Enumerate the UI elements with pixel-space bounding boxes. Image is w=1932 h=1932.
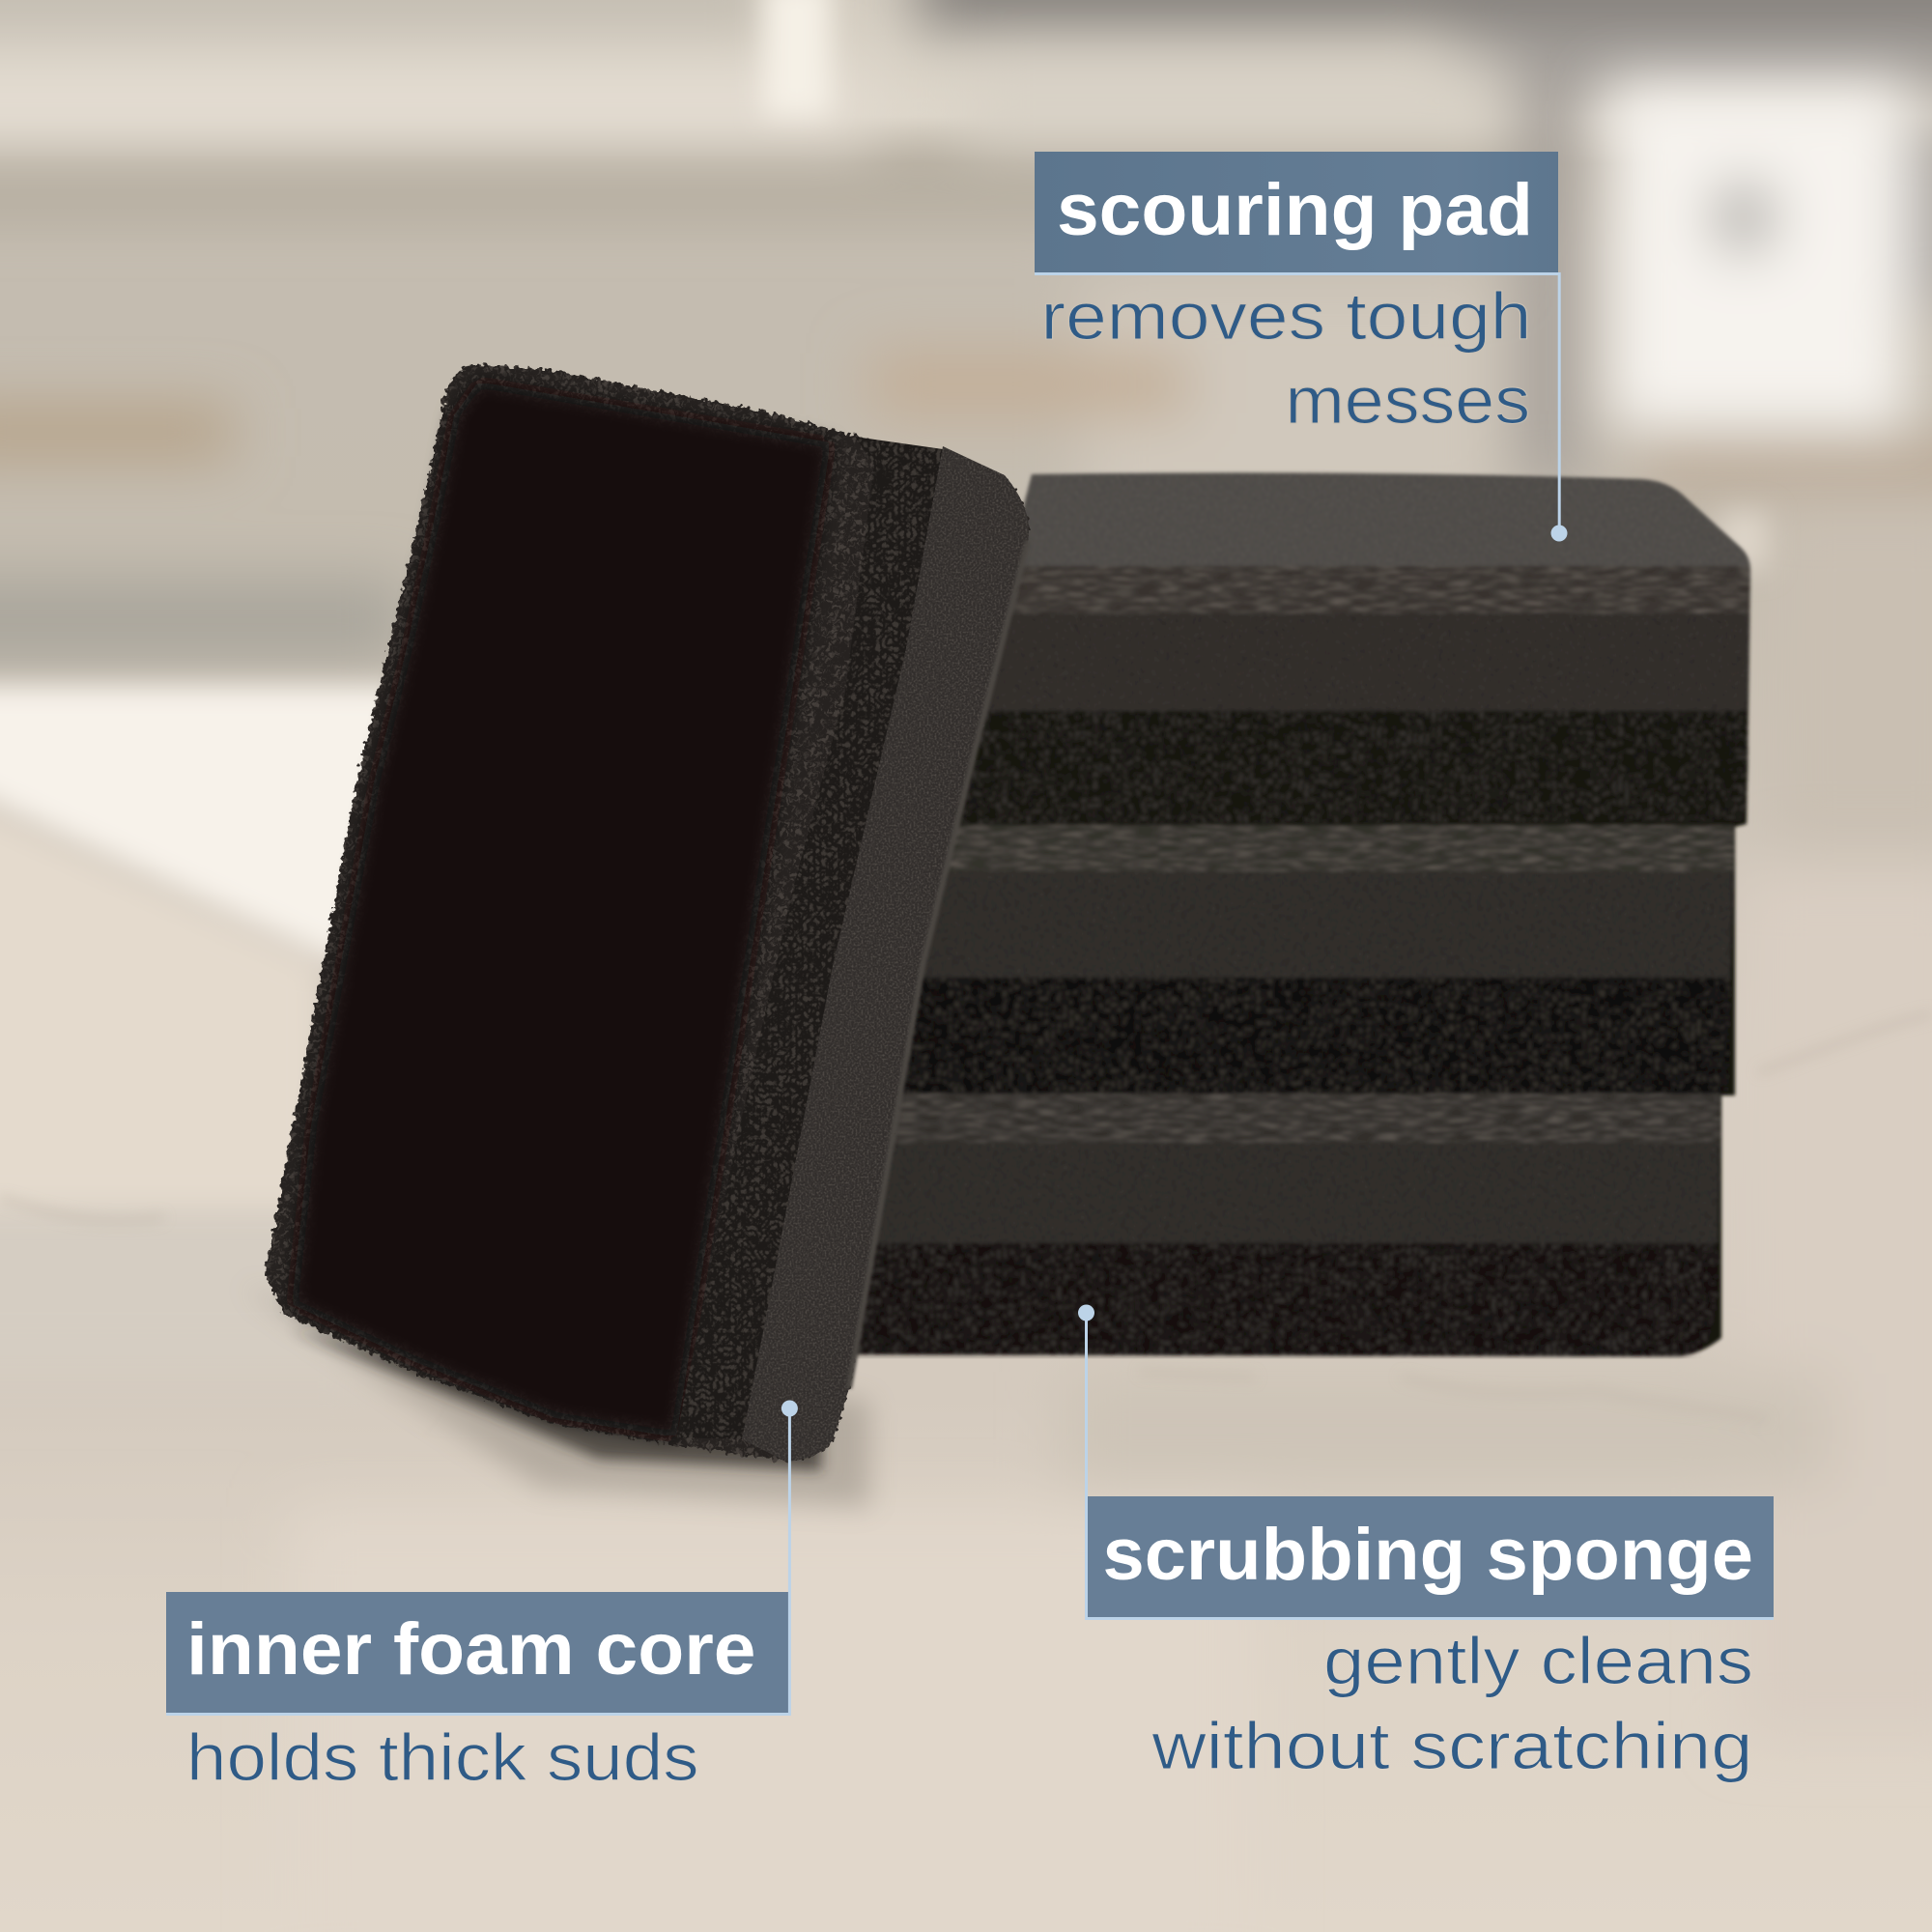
label: inner foam core: inner foam core <box>186 1608 755 1690</box>
shadow under sponges <box>242 1285 1690 1507</box>
open pore band <box>676 437 943 1439</box>
description: without scratching <box>1151 1709 1752 1783</box>
dark pore face <box>292 382 831 1437</box>
leader line and dot <box>1035 274 1567 541</box>
middle sponge <box>860 825 1734 1095</box>
description: gently cleans <box>1323 1624 1753 1698</box>
callout: scrubbing sponge <box>1078 1304 1774 1783</box>
top sponge: scouring pad surface <box>976 472 1750 618</box>
label: inner foam core <box>166 1592 788 1713</box>
stack backing <box>831 570 1750 1356</box>
description: removes tough <box>1041 279 1532 354</box>
bottom sponge <box>831 1094 1719 1356</box>
label: scrubbing sponge <box>1088 1496 1774 1617</box>
label: scrubbing sponge: scrubbing sponge <box>1103 1514 1753 1596</box>
sponge stack <box>831 472 1750 1356</box>
description: messes <box>1285 363 1530 438</box>
top sponge: foam and pores <box>918 613 1749 824</box>
fuzzy sponge body <box>265 364 1029 1462</box>
leader line and dot <box>166 1401 798 1714</box>
label: scouring pad: scouring pad <box>1057 169 1533 251</box>
description: holds thick suds <box>186 1720 699 1795</box>
lit outer edge of side <box>849 541 1028 1388</box>
grey side layer <box>742 446 1029 1462</box>
leader line and dot <box>1078 1304 1774 1619</box>
label: scouring pad <box>1035 152 1558 272</box>
description <box>1041 279 1532 438</box>
marble veins <box>0 1014 1932 1420</box>
callout: scouring pad <box>1035 152 1567 541</box>
callout: inner foam core <box>166 1401 798 1795</box>
tilted front sponge <box>265 364 1029 1462</box>
description <box>1151 1624 1753 1783</box>
